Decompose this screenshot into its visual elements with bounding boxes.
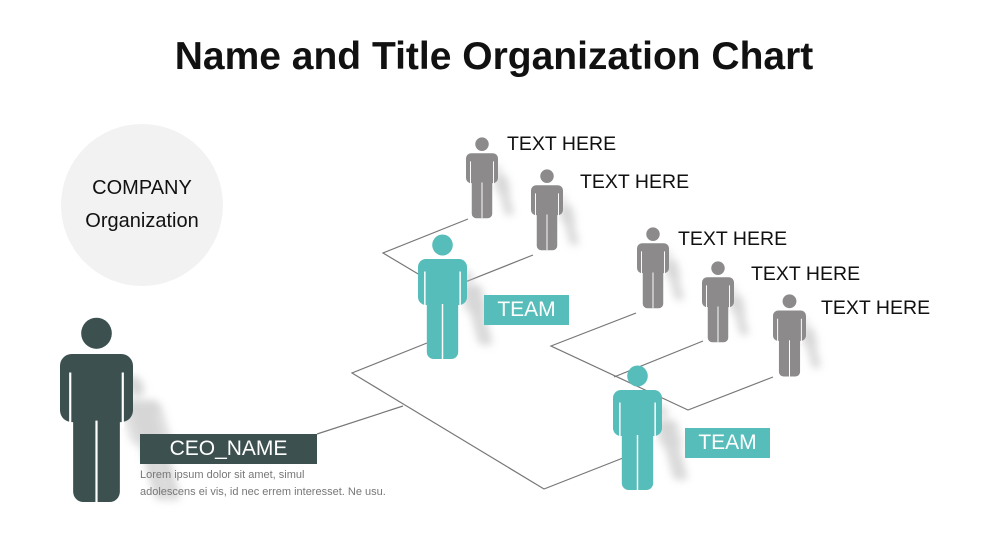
company circle: Organization [85, 210, 199, 232]
CEO description [140, 469, 386, 498]
person: team 1 [418, 234, 467, 359]
team label 1 [484, 295, 569, 325]
company circle: COMPANY [92, 177, 192, 199]
company circle [61, 124, 223, 286]
title: Name and Title Organization Chart [175, 35, 813, 78]
team label 2: TEAM [698, 431, 757, 454]
person: member 5 [773, 294, 806, 376]
label: TEXT HERE [678, 228, 787, 250]
CEO name box: CEO_NAME [170, 437, 287, 460]
CEO name box [140, 434, 317, 464]
CEO description: Lorem ipsum dolor sit amet, simul [140, 469, 304, 481]
person: member 3 [637, 227, 669, 308]
team label 1: TEAM [497, 298, 556, 321]
label: TEXT HERE [821, 297, 930, 319]
person: team 2 [613, 366, 662, 490]
shadows [112, 165, 824, 500]
person: CEO [60, 318, 133, 502]
person: member 1 [466, 137, 498, 218]
person: member 2 [531, 169, 563, 250]
CEO description: adolescens ei vis, id nec errem interesset. Ne usu. [140, 486, 386, 498]
connector lines [317, 219, 773, 489]
label: TEXT HERE [751, 263, 860, 285]
person: member 4 [702, 261, 734, 342]
member labels: TEXT HERE [507, 133, 616, 155]
label: TEXT HERE [580, 171, 689, 193]
team label 2 [685, 428, 770, 458]
